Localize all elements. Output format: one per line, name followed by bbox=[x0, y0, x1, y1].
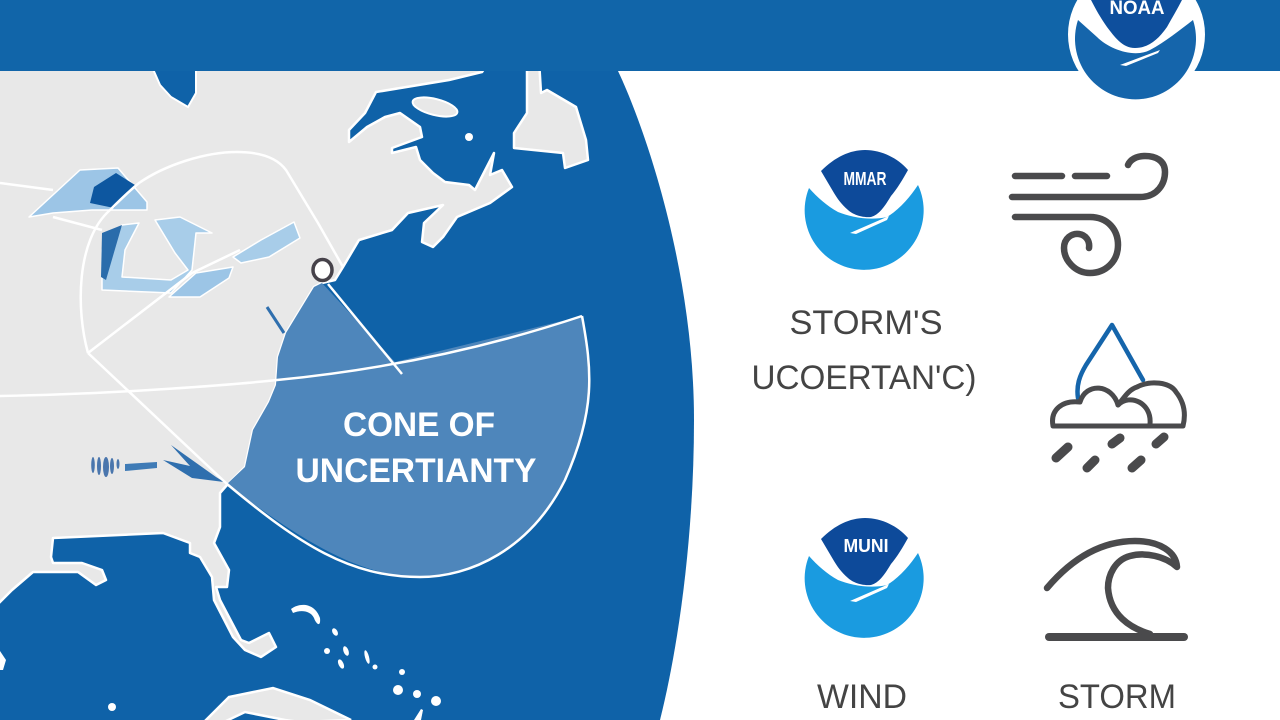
Great Lakes bbox=[29, 168, 300, 297]
icon: wind bbox=[1012, 156, 1165, 273]
logo: wind bbox=[805, 518, 924, 638]
inner track bbox=[88, 250, 240, 353]
Newfoundland bbox=[514, 60, 588, 168]
cone label: UNCERTIANTY bbox=[296, 452, 537, 490]
blue inland patches bbox=[91, 445, 224, 482]
ocean bbox=[0, 71, 700, 720]
cloud inner arc bbox=[1118, 400, 1150, 424]
icon: storm wave bbox=[1047, 541, 1184, 637]
lake superior bbox=[29, 168, 147, 217]
lake ontario bbox=[233, 222, 300, 263]
land: North America bbox=[0, 60, 512, 657]
logo top dark bbox=[1090, 0, 1183, 48]
Bahamas and Caribbean islands bbox=[0, 605, 441, 720]
track line to cone bbox=[328, 284, 402, 374]
lake superior dark patch bbox=[90, 173, 135, 208]
rain drop outline bbox=[1077, 325, 1143, 398]
cone label bbox=[298, 412, 536, 482]
lake michigan dark patch bbox=[101, 225, 122, 280]
Hudson bay inlet bbox=[153, 71, 197, 108]
borders bbox=[0, 183, 102, 230]
cone of uncertainty fill bbox=[227, 283, 589, 577]
header band bbox=[0, 0, 1280, 71]
logo: wind: MUNI bbox=[844, 536, 888, 556]
label: wind: WIND bbox=[817, 678, 907, 716]
lake michigan and huron bbox=[102, 217, 212, 293]
NOAA header logo bbox=[1068, 0, 1205, 103]
cone label: CONE OF bbox=[343, 406, 495, 444]
map panel bbox=[0, 60, 700, 720]
storm position marker bbox=[313, 260, 332, 280]
lake erie bbox=[169, 267, 233, 297]
patch triangle bbox=[163, 445, 224, 482]
patch stripes bbox=[91, 457, 120, 477]
cone right arc bbox=[88, 316, 589, 577]
cone outline bbox=[0, 152, 589, 577]
logo: storm's uncertainty: MMAR bbox=[844, 169, 886, 189]
cloud bbox=[1053, 383, 1184, 426]
Anticosti island bbox=[412, 96, 458, 118]
Cuba bbox=[204, 688, 351, 720]
label: storm's uncertainty: STORM'S bbox=[790, 304, 942, 342]
label: storm: STORM bbox=[1058, 678, 1176, 716]
logo bird tail bbox=[1120, 50, 1160, 66]
cone upper outline bbox=[81, 152, 343, 353]
logo: storm's uncertainty bbox=[805, 150, 924, 270]
logo lower blue bbox=[1075, 20, 1196, 99]
rain dashes bbox=[1056, 437, 1164, 468]
icon: rain cloud bbox=[1053, 325, 1184, 468]
cone top edge bbox=[0, 316, 582, 396]
Chesapeake inlet bbox=[267, 307, 284, 333]
Prince Edward Island bbox=[465, 133, 473, 141]
label: storm's uncertainty bbox=[752, 304, 976, 397]
patch band bbox=[125, 462, 157, 471]
label: storm's uncertainty: UCOERTAN'C) bbox=[752, 359, 976, 397]
